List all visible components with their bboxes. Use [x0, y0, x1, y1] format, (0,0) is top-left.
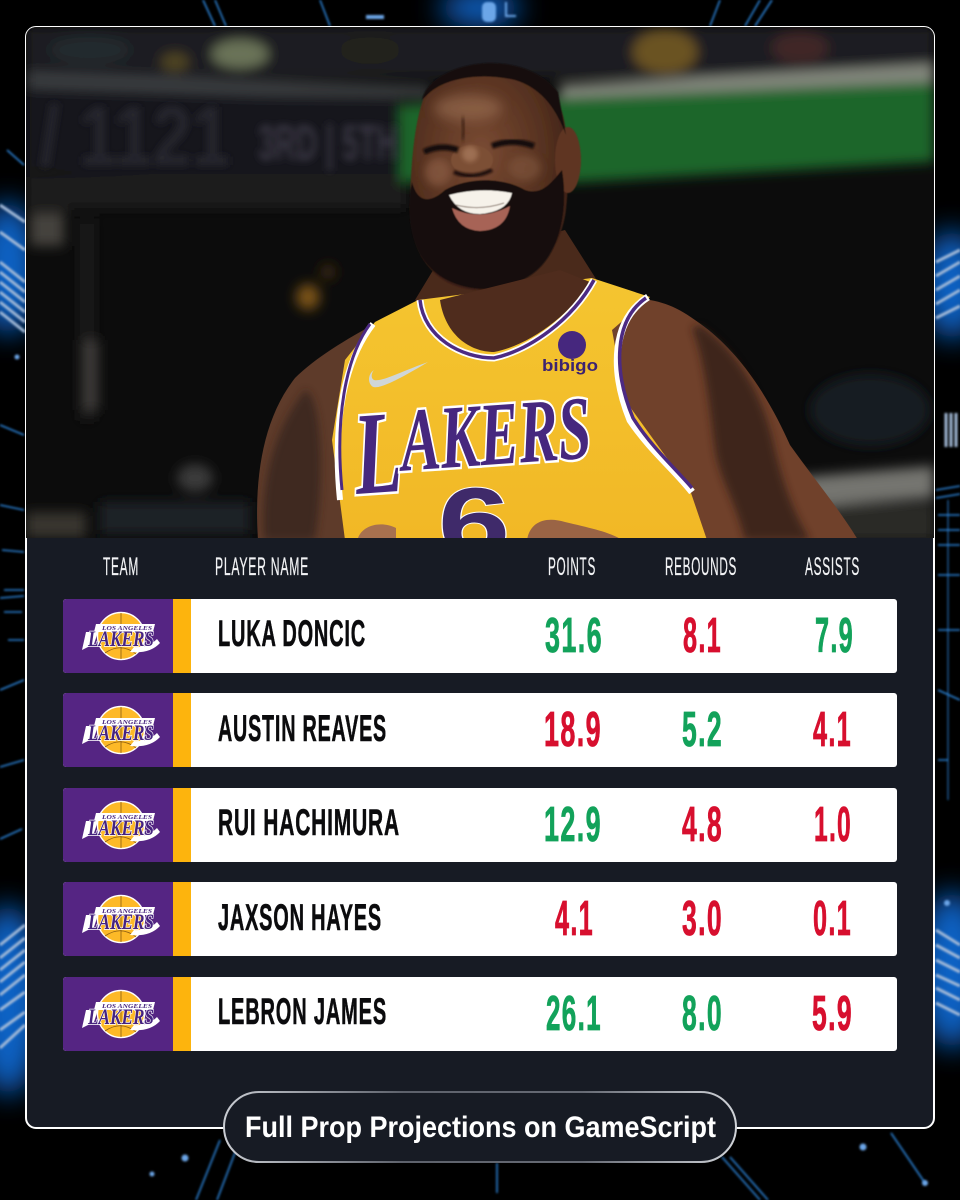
- table header: PLAYER NAME: [215, 553, 309, 581]
- hero photo: [26, 27, 934, 577]
- call to action pill: Full Prop Projections on GameScript: [245, 1111, 716, 1144]
- rebounds: 8.0: [682, 987, 723, 1041]
- icon: Lakers logo: LOS ANGELES: [101, 1004, 153, 1010]
- row: Luka Doncic: [63, 599, 897, 673]
- row: Austin Reaves: [63, 693, 897, 767]
- jersey wordmark: L: [349, 386, 406, 520]
- call to action pill: [224, 1092, 736, 1162]
- icon: Lakers logo: [82, 802, 160, 848]
- player figure: [257, 63, 858, 577]
- points: 12.9: [544, 798, 602, 852]
- beard: [409, 170, 564, 289]
- cheek highlights: [425, 158, 451, 186]
- icon: Lakers logo: LAKERS: [87, 626, 154, 651]
- table header: TEAM: [103, 553, 139, 581]
- nike swoosh: [369, 362, 428, 387]
- rebounds: 4.8: [682, 798, 723, 852]
- points: 31.6: [545, 609, 603, 663]
- card panel: ASSISTS: [805, 553, 860, 581]
- rebounds: 8.1: [683, 609, 722, 663]
- assists: 5.9: [812, 987, 853, 1041]
- player name: JAXSON HAYES: [218, 897, 382, 938]
- left arm: [257, 330, 364, 538]
- icon: Lakers logo: LOS ANGELES: [101, 909, 153, 915]
- assists: 7.9: [815, 609, 854, 663]
- jersey number: 6: [438, 467, 510, 577]
- row: Rui Hachimura: [63, 788, 897, 862]
- player name: LEBRON JAMES: [218, 991, 387, 1032]
- collar trim: [420, 280, 594, 358]
- eyes: [424, 142, 534, 152]
- row: LeBron James: [63, 977, 897, 1051]
- player name: AUSTIN REAVES: [218, 708, 387, 749]
- jersey wordmark: AKERS: [394, 379, 594, 491]
- blurred arena background: 3RD | 5TH: [258, 115, 398, 172]
- right arm: [600, 298, 858, 540]
- neck: [415, 230, 596, 301]
- player name: LUKA DONCIC: [218, 613, 366, 654]
- icon: Lakers logo: LAKERS: [87, 909, 154, 934]
- table header: REBOUNDS: [665, 553, 737, 581]
- points: 26.1: [546, 987, 602, 1041]
- player name: RUI HACHIMURA: [218, 802, 400, 843]
- table header: [103, 553, 860, 581]
- jersey: [332, 278, 707, 540]
- icon: Lakers logo: LAKERS: [87, 720, 154, 745]
- arm trims: [617, 297, 692, 492]
- icon: Lakers logo: LAKERS: [87, 1004, 154, 1029]
- nose: [451, 145, 493, 175]
- points: 4.1: [555, 892, 594, 946]
- lower lip: [452, 206, 510, 231]
- blurred arena background: [26, 27, 934, 541]
- icon: Lakers logo: [82, 896, 160, 942]
- row: Jaxson Hayes: [63, 882, 897, 956]
- assists: 0.1: [813, 892, 852, 946]
- rebounds: 5.2: [682, 703, 723, 757]
- icon: Lakers logo: [82, 706, 160, 754]
- icon: Lakers logo: [82, 990, 160, 1038]
- blurred arena background: / 1121: [40, 89, 230, 183]
- jersey wordmark: [354, 396, 590, 497]
- head: [409, 63, 581, 290]
- hands: [358, 524, 396, 538]
- icon: Lakers logo: LOS ANGELES: [101, 626, 153, 632]
- points: 18.9: [544, 703, 602, 757]
- bibigo patch: [542, 331, 598, 375]
- assists: 1.0: [814, 798, 852, 852]
- icon: Lakers logo: LOS ANGELES: [101, 815, 153, 821]
- rebounds: 3.0: [682, 892, 723, 946]
- icon: Lakers logo: LAKERS: [87, 815, 154, 840]
- teeth: [449, 190, 512, 214]
- hair: [422, 63, 566, 135]
- icon: Lakers logo: LOS ANGELES: [101, 720, 153, 726]
- ear: [555, 127, 581, 193]
- assists: 4.1: [813, 703, 852, 757]
- forehead highlight: [434, 95, 502, 121]
- icon: Lakers logo: [82, 612, 160, 660]
- bibigo patch: bibigo: [542, 356, 598, 375]
- table header: POINTS: [548, 553, 596, 581]
